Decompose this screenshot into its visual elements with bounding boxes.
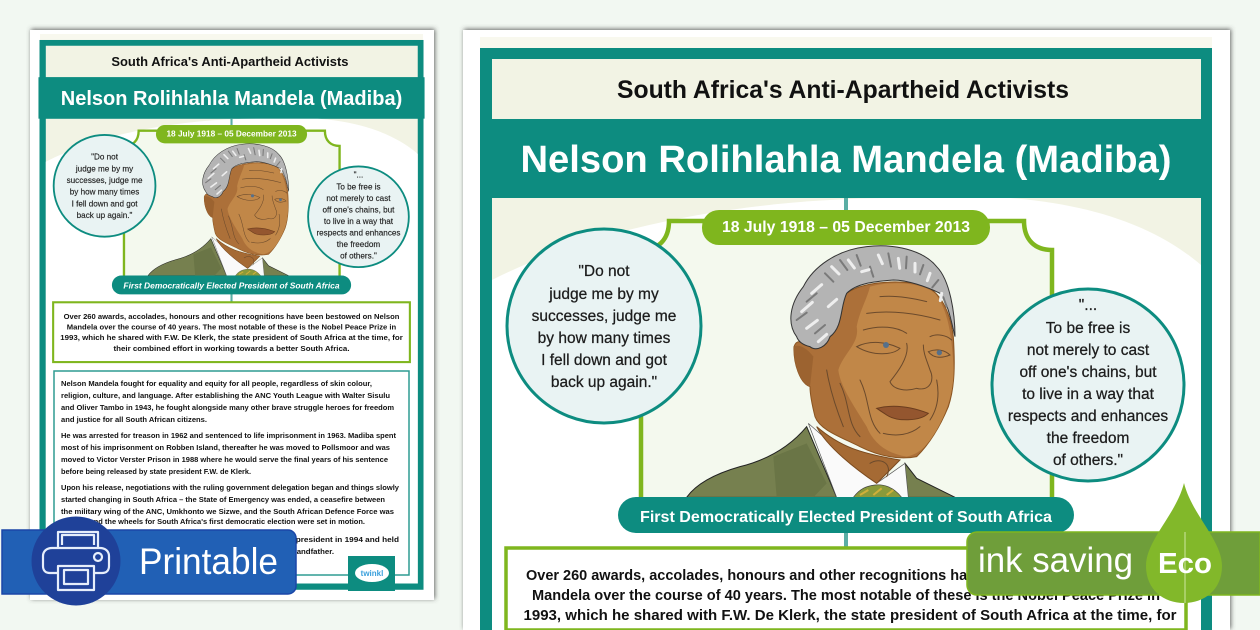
panel: small poster preview: I fell down and got (72, 199, 138, 208)
text block: biography box: most of his imprisonment on Robben Island, thereafter he was moved to Pollsmoor and was (61, 443, 390, 452)
title band: Nelson Rolihlahla Mandela (Madiba) (520, 139, 1172, 181)
quote circle: right: respects and enhances (1008, 408, 1168, 425)
caption pill: First Democratically Elected President of South Africa (640, 509, 1052, 526)
text block: biography box: started changing in South Africa – the State of Emergency was ended, a ceasefire between (61, 495, 385, 504)
panel: small poster preview: Mandela over the course of 40 years. The most notable of these is the Nobel Peace Prize in (67, 323, 397, 332)
panel: small poster preview: successes, judge me (67, 176, 143, 185)
text block: biography box: and justice for all South African citizens. (61, 415, 207, 424)
text block: biography box: agreed, and the wheels for South Africa's first democratic election were set in motion. (61, 517, 365, 526)
panel: small poster preview (30, 30, 434, 600)
panel: small poster preview: Over 260 awards, accolades, honours and other recognitions have been bestowed on Nelson (64, 312, 400, 321)
quote circle: left: "Do not (578, 263, 630, 280)
quote circle: right: to live in a way that (1022, 386, 1155, 403)
text block: biography box: He was arrested for treason in 1962 and sentenced to life imprisonment in 1963. Madiba spent (61, 431, 396, 440)
badge: ink saving eco: ink saving (978, 541, 1133, 580)
quote circle: right: of others." (1053, 452, 1123, 469)
badge: printable (2, 516, 296, 606)
quote circle: left: by how many times (538, 330, 671, 347)
panel: small poster preview: 18 July 1918 – 05 December 2013 (166, 129, 297, 139)
text block: biography box: the position until 1999. He is still known as Tata, Madiba, and grandfather. (61, 547, 334, 556)
panel: small poster preview: Nelson Rolihlahla Mandela (Madiba) (61, 88, 402, 110)
badge: ink saving eco: Eco (1158, 548, 1212, 580)
panel: small poster preview: of others." (340, 252, 377, 261)
quote circle: right: off one's chains, but (1019, 364, 1157, 381)
caption pill (618, 497, 1074, 533)
icon: twinkl logo (348, 556, 395, 591)
icon: printer (32, 516, 120, 606)
quote circle: left: judge me by my (548, 286, 659, 303)
panel: large poster preview (463, 30, 1230, 630)
panel: small poster preview: "Do not (91, 153, 119, 162)
poster frame (480, 48, 1212, 630)
quote circle: right (992, 289, 1184, 481)
panel: small poster preview: respects and enhances (316, 229, 400, 238)
quote circle: right: the freedom (1047, 430, 1129, 447)
panel: small poster preview: First Democratically Elected President of South Africa (123, 281, 340, 291)
panel: small poster preview: 1993, which he shared with F.W. De Klerk, the state president of South Africa at the time, for (60, 333, 403, 342)
panel: small poster preview: off one's chains, but (323, 206, 395, 215)
panel: small poster preview: not merely to cast (326, 194, 391, 203)
quote circle: left: I fell down and got (541, 352, 668, 369)
background wave (492, 198, 1201, 630)
text block: awards summary: 1993, which he shared with F.W. De Klerk, the state president of South Africa at the time, for (524, 608, 1177, 624)
panel: small poster preview: judge me by my (75, 165, 134, 174)
illustration: Mandela portrait (687, 246, 955, 497)
panel: small poster preview: their combined effort in working towards a better South Africa. (113, 344, 350, 353)
quote circle: right: To be free is (1046, 320, 1130, 337)
text block: biography box: Upon his release, negotiations with the ruling government delegation began and things slowly (61, 483, 400, 492)
text block: biography box: and Oliver Tambo in 1943, he fought alongside many other brave struggle heroes for freedom (61, 403, 394, 412)
panel: small poster preview: the freedom (337, 240, 380, 249)
icon: eco drop (1146, 483, 1222, 603)
quote circle: left: successes, judge me (532, 308, 676, 325)
quote circle: left: back up again." (551, 374, 657, 391)
quote circle: right: not merely to cast (1027, 342, 1150, 359)
date pill (702, 210, 990, 245)
panel: small poster preview: "... (354, 170, 363, 179)
panel: small poster preview: to live in a way that (324, 217, 394, 226)
quote circle: right: "... (1079, 297, 1097, 314)
text block: awards summary: Mandela over the course of 40 years. The most notable of these is the Nobel Peace Prize in (532, 588, 1160, 604)
icon: twinkl logo: twinkl (361, 569, 383, 578)
header: subtitle band (492, 59, 1201, 119)
badge: printable: Printable (139, 541, 278, 582)
text block: biography box: the military wing of the ANC, Umkhonto we Sizwe, and the South African Defence Force was (61, 507, 394, 516)
badge: ink saving eco (967, 483, 1260, 603)
quote circle: left (507, 229, 701, 423)
text block: biography box: Nelson Mandela fought for equality and equity for all people, regardless of skin colour, (61, 379, 372, 388)
text block: biography box: Nelson Mandela was elected South Africa's first democratic president in 1994 and held (61, 535, 399, 544)
text block: biography box (54, 371, 409, 575)
portrait frame (641, 221, 1052, 505)
text block: biography box: before being released by state president F.W. de Klerk. (61, 467, 251, 476)
date pill: 18 July 1918 – 05 December 2013 (722, 219, 970, 236)
text block: awards summary (506, 548, 1186, 630)
text block: biography box: religion, culture, and language. After establishing the ANC Youth League with Walter Sisulu (61, 391, 390, 400)
text block: awards summary: Over 260 awards, accolades, honours and other recognitions have been bestowed on Nelson (526, 568, 1166, 584)
text block: biography box: moved to Victor Verster Prison in 1988 where he would serve the final years of his sentence (61, 455, 388, 464)
panel: small poster preview: back up again." (77, 211, 133, 220)
panel: small poster preview: South Africa's Anti-Apartheid Activists (111, 54, 348, 69)
panel: small poster preview: by how many times (70, 188, 139, 197)
panel: small poster preview: To be free is (336, 182, 381, 191)
title band (480, 119, 1212, 198)
header: subtitle band: South Africa's Anti-Apartheid Activists (617, 76, 1069, 104)
